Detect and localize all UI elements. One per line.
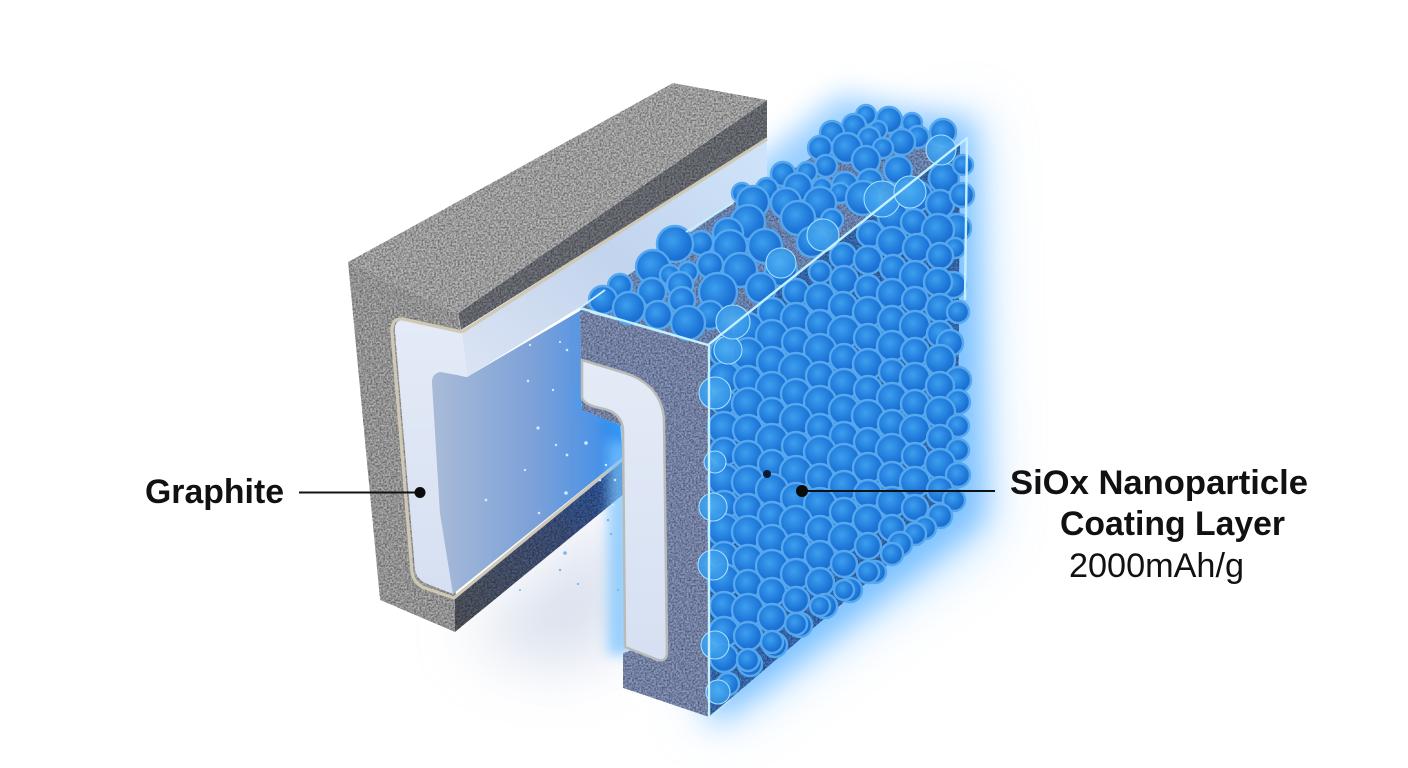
graphite inner white layer [395, 320, 467, 594]
SiOx text line one: SiOx Nanoparticle [1010, 464, 1308, 502]
cream liner [392, 139, 767, 598]
SiOx text line two: Coating Layer [1060, 505, 1285, 543]
graphite back wall [432, 305, 623, 594]
glowing box outline [580, 138, 967, 717]
lower bar dark face [455, 458, 625, 632]
graphite front face [348, 262, 461, 632]
blue glow beside the coated block [582, 398, 632, 655]
capacity value: 2000mAh/g [1069, 547, 1244, 585]
panel: graphite block [348, 83, 767, 632]
Graphite leader line [299, 487, 426, 498]
SiOx leader line [796, 485, 995, 497]
panel: SiOx coated block [580, 105, 974, 717]
translucent particles on box edges [698, 135, 956, 704]
Graphite text: Graphite [145, 473, 284, 511]
nanoparticles: side surface [708, 155, 974, 695]
coated block top surface [580, 125, 950, 345]
graphite ceiling surface [462, 140, 767, 377]
marker dot [763, 470, 771, 478]
coated block front face [580, 310, 709, 717]
graphite upper dark face [458, 100, 767, 330]
nanoparticles: top surface [589, 105, 956, 340]
label: SiOx coating [763, 464, 1308, 585]
graphite top face [348, 83, 767, 313]
label: Graphite [145, 473, 426, 511]
sparkles in gap [485, 341, 619, 591]
floor shadow and glow [465, 95, 985, 728]
coated block side surface [708, 142, 960, 717]
coated block inner white layer [582, 360, 667, 660]
